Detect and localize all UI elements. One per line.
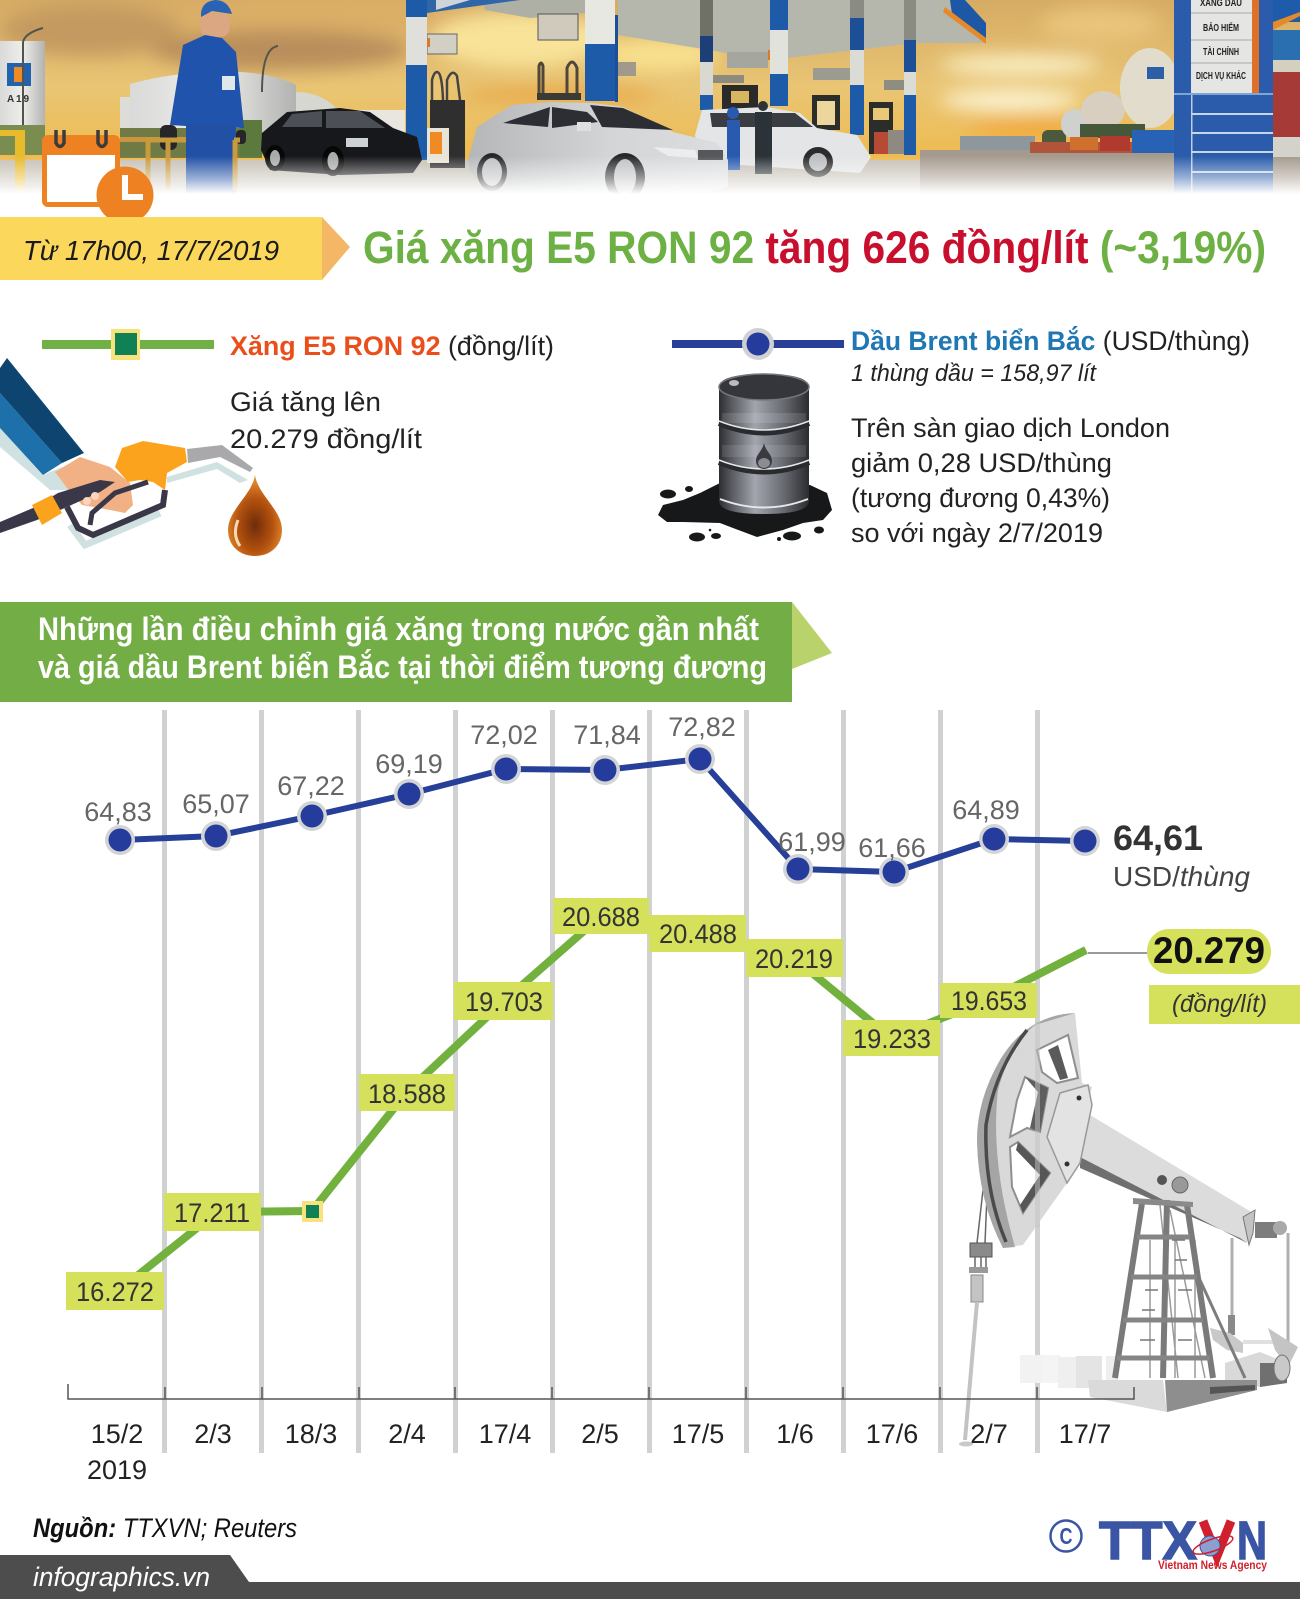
header photo: petrol station: BẢO HIỂM	[1203, 21, 1239, 34]
line chart: Brent oil price: 72,02	[470, 720, 538, 750]
text: London exchange: giảm 0,28 USD/thùng	[851, 448, 1112, 478]
final petrol value callout: 20.279	[1153, 930, 1265, 971]
text: London exchange: (tương đương 0,43%)	[851, 483, 1110, 513]
text: petrol price: 20.279 đồng/lít	[230, 424, 423, 454]
header photo: petrol station: TÀI CHÍNH	[1203, 45, 1239, 58]
final Brent value: USD/thùng	[1113, 861, 1250, 892]
pumps	[430, 100, 465, 168]
title: Giá xăng E5 RON 92 tăng 626 đồng/lít (~3,19%)	[363, 222, 1266, 273]
line chart: Brent oil price: 71,84	[573, 720, 641, 750]
legend: Brent line marker	[672, 328, 844, 360]
x axis date labels	[87, 1419, 1111, 1485]
line chart: Brent oil price: 61,66	[858, 833, 926, 863]
logo: TTXVN: C	[1060, 1523, 1072, 1549]
line chart: E5 RON 92 petrol price: 17.211	[174, 1198, 250, 1228]
line chart: E5 RON 92 petrol price: 19.233	[853, 1024, 931, 1054]
x axis date labels: 17/5	[672, 1419, 724, 1449]
line chart: E5 RON 92 petrol price: 20.488	[659, 919, 737, 949]
x axis date labels: 2/4	[388, 1419, 426, 1449]
line chart: E5 RON 92 petrol price: 19.703	[465, 987, 543, 1017]
final Brent value	[1113, 819, 1250, 892]
canopy	[483, 0, 585, 18]
legend: petrol label: Xăng E5 RON 92 (đồng/lít)	[230, 331, 554, 361]
line chart: Brent oil price: 61,99	[778, 827, 846, 857]
logo: TTXVN	[1050, 1511, 1267, 1572]
x axis	[68, 1384, 1134, 1399]
x axis date labels: 2/7	[970, 1419, 1008, 1449]
section banner	[0, 602, 832, 702]
date ribbon: Từ 17h00, 17/7/2019	[23, 235, 279, 266]
line chart: Brent oil price: 65,07	[182, 789, 250, 819]
line chart: E5 RON 92 petrol price: 19.653	[951, 986, 1027, 1016]
logo: TTXVN: N	[1237, 1511, 1267, 1571]
header photo: petrol station: A19	[7, 94, 29, 105]
x axis date labels: 1/6	[776, 1419, 814, 1449]
logo: TTXVN: TTX	[1099, 1511, 1197, 1571]
line chart: E5 RON 92 petrol price: 20.219	[755, 944, 833, 974]
x axis date labels: 15/2	[91, 1419, 143, 1449]
source note: Nguồn: TTXVN; Reuters	[33, 1513, 297, 1543]
icon: hand with fuel nozzle	[0, 358, 253, 545]
text: London exchange: so với ngày 2/7/2019	[851, 518, 1103, 548]
illustration: oil pumpjack	[959, 1013, 1298, 1446]
line chart: Brent oil price: 69,19	[375, 749, 443, 779]
text: London exchange	[851, 413, 1170, 548]
legend: petrol line marker	[42, 329, 214, 360]
x axis date labels: 2/5	[581, 1419, 619, 1449]
text: petrol price: Giá tăng lên	[230, 387, 381, 417]
final petrol value callout	[1088, 929, 1300, 1024]
woman	[200, 13, 230, 37]
line chart: Brent oil price	[84, 712, 1100, 887]
text: London exchange: Trên sàn giao dịch London	[851, 413, 1170, 443]
icon: oil barrel on spill	[658, 374, 832, 542]
final petrol value callout: (đồng/lít)	[1172, 990, 1267, 1018]
line chart: Brent oil price: 64,89	[952, 795, 1020, 825]
x axis date labels: 18/3	[285, 1419, 337, 1449]
header photo: petrol station	[0, 0, 1300, 201]
SUV	[695, 107, 871, 173]
line chart: E5 RON 92 petrol price: 20.688	[562, 902, 640, 932]
line chart: Brent oil price: 72,82	[668, 712, 736, 742]
section banner: Những lần điều chỉnh giá xăng trong nước gần nhất	[38, 611, 759, 647]
logo: TTXVN: Vietnam News Agency	[1158, 1558, 1267, 1572]
footer bar: infographics.vn	[33, 1562, 210, 1592]
x axis date labels: 2019	[87, 1455, 147, 1485]
line chart: E5 RON 92 petrol price	[66, 898, 1086, 1310]
line chart: Brent oil price: 64,83	[84, 797, 152, 827]
footer bar	[0, 1555, 1300, 1599]
section banner: và giá dầu Brent biển Bắc tại thời điểm tương đương	[38, 649, 767, 685]
date ribbon	[0, 217, 350, 280]
line chart: E5 RON 92 petrol price: 16.272	[76, 1277, 154, 1307]
text: barrel conversion: 1 thùng dầu = 158,97 lít	[851, 360, 1097, 387]
line chart: Brent oil price: 67,22	[277, 771, 345, 801]
line chart: E5 RON 92 petrol price: 18.588	[368, 1079, 446, 1109]
price board	[1174, 0, 1273, 194]
pillars	[406, 0, 427, 160]
text: petrol price	[230, 387, 423, 454]
icon: calendar with clock	[42, 130, 154, 224]
x axis date labels: 2/3	[194, 1419, 232, 1449]
icon: orange oil drop	[228, 475, 282, 556]
silver car	[468, 102, 728, 194]
final Brent value: 64,61	[1113, 819, 1203, 858]
x axis date labels: 17/7	[1059, 1419, 1111, 1449]
header photo: petrol station: DỊCH VỤ KHÁC	[1196, 69, 1246, 82]
x axis date labels: 17/4	[479, 1419, 531, 1449]
right distance	[960, 136, 1035, 150]
x axis date labels: 17/6	[866, 1419, 918, 1449]
black car	[261, 108, 422, 175]
legend: Brent label: Dầu Brent biển Bắc (USD/thùng)	[851, 325, 1250, 356]
